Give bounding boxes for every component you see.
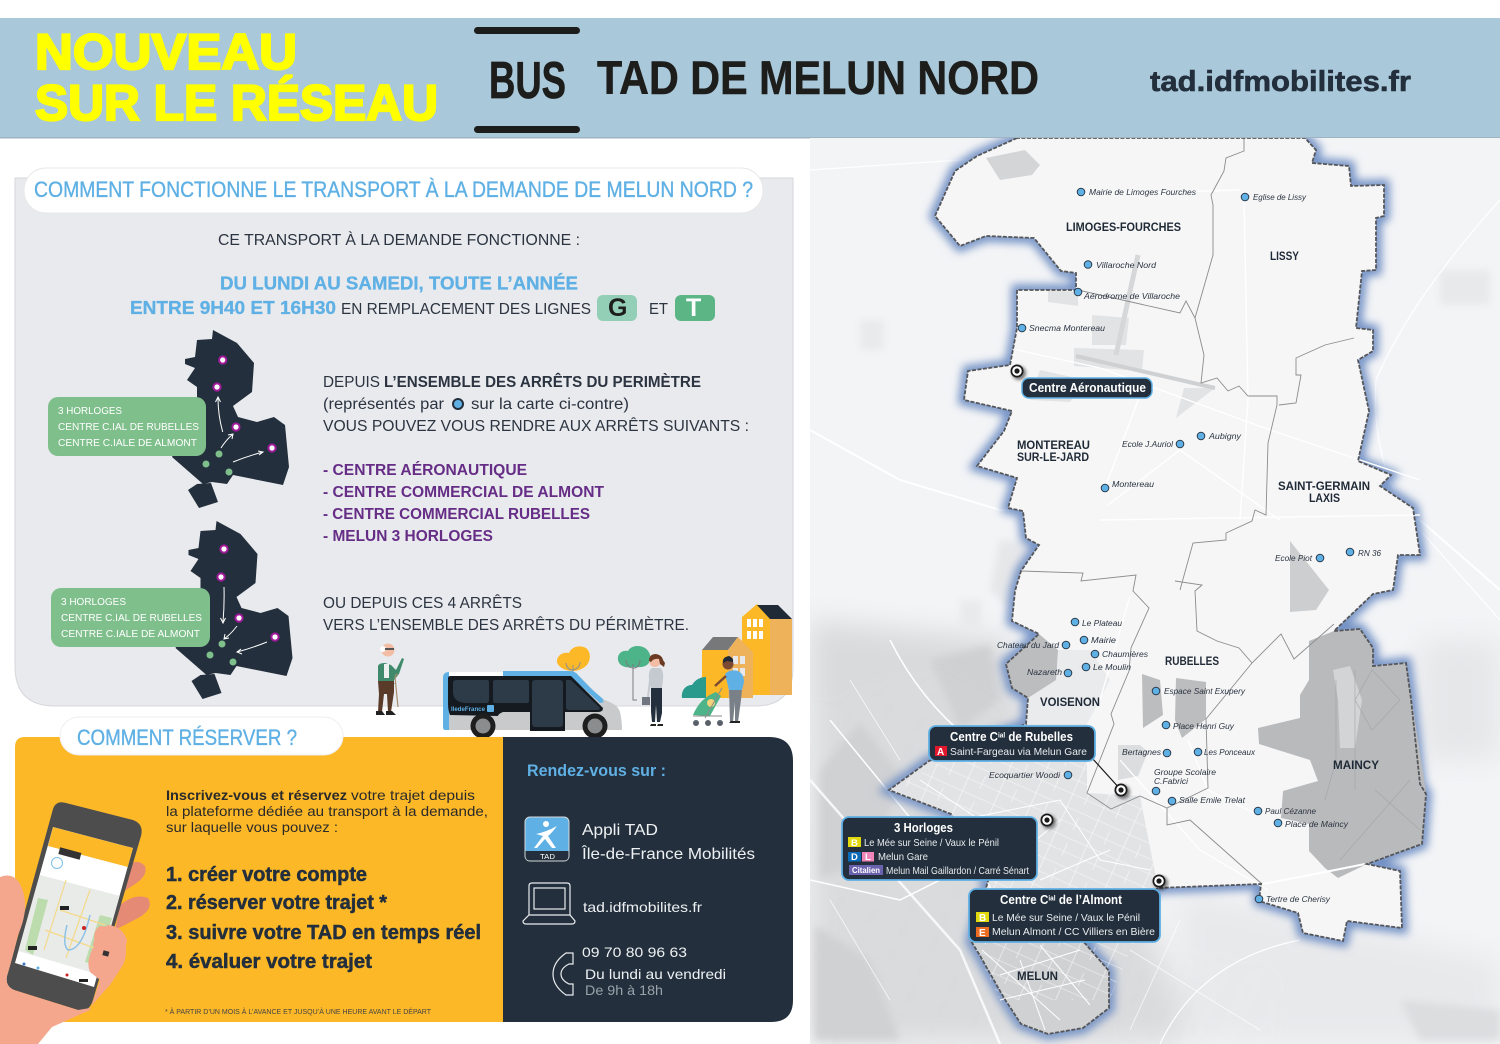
map diagram 2: from hubs to all stops: CENTRE C.IALE DE ALMONT	[61, 628, 201, 640]
icon: TAD app: TAD	[540, 852, 556, 861]
return trip text	[323, 595, 689, 634]
callout: 3 Horloges: Melun Mail Gaillardon / Carré Sénart	[886, 865, 1029, 877]
phone number and hours: De 9h à 18h	[585, 982, 663, 998]
commune labels: MAINCY	[1333, 758, 1379, 772]
map diagram 1: from all stops to hubs: CENTRE C.IAL DE RUBELLES	[58, 421, 199, 433]
schedule text: CE TRANSPORT À LA DEMANDE FONCTIONNE :	[218, 232, 580, 249]
stop labels: Eglise de Lissy	[1253, 192, 1307, 202]
illustration: hand holding phone	[0, 802, 150, 1044]
illustration: yellow tree	[557, 646, 590, 675]
stop labels	[989, 187, 1381, 904]
callout: Centre Commercial de Rubelles: A	[937, 747, 944, 758]
callout: Centre Commercial de l'Almont: B	[979, 913, 986, 924]
callout: 3 Horloges	[842, 817, 1037, 880]
footnote: * À PARTIR D’UN MOIS À L’AVANCE ET JUSQU’À UNE HEURE AVANT LE DÉPART	[165, 1007, 432, 1016]
line badge T: T	[686, 294, 701, 322]
stop labels: Tertre de Cherisy	[1266, 894, 1331, 904]
return trip text: OU DEPUIS CES 4 ARRÊTS	[323, 595, 522, 612]
booking intro: votre trajet depuis	[351, 787, 475, 803]
section title pill	[60, 717, 343, 755]
header band	[0, 18, 1500, 138]
service-area dashed outline	[889, 138, 1426, 1034]
commune labels: LAXIS	[1309, 491, 1340, 505]
callout: Centre Commercial de l'Almont: Melun Almont / CC Villiers en Bière	[992, 926, 1155, 938]
icon: phone handset	[553, 953, 573, 995]
destination list: - CENTRE COMMERCIAL DE ALMONT	[323, 484, 605, 501]
web address: tad.idfmobilites.fr	[583, 899, 702, 915]
commune labels: RUBELLES	[1165, 654, 1219, 668]
stop labels: Le Plateau	[1082, 618, 1122, 628]
destination list: - MELUN 3 HORLOGES	[323, 528, 493, 545]
stop labels: Chateau du Jard	[997, 640, 1060, 650]
callout: 3 Horloges: B	[851, 838, 858, 849]
map background	[790, 138, 1500, 1044]
commune labels: SAINT-GERMAIN	[1278, 479, 1370, 493]
commune labels: LISSY	[1270, 249, 1299, 263]
service-area fill	[889, 138, 1426, 1034]
icon: laptop	[523, 883, 575, 924]
booking intro: sur laquelle vous pouvez :	[166, 819, 338, 835]
stop labels: Villaroche Nord	[1096, 260, 1157, 270]
illustration: woman with bag	[642, 654, 665, 726]
destination list: - CENTRE AÉRONAUTIQUE	[323, 462, 527, 479]
panel: how it works	[15, 168, 793, 706]
schedule text: ENTRE 9H40 ET 16H30	[130, 298, 336, 318]
callout: 3 Horloges: Citalien	[852, 866, 880, 875]
schedule text: ET	[649, 301, 669, 318]
callout: 3 Horloges: D	[851, 852, 858, 863]
destination list: - CENTRE COMMERCIAL RUBELLES	[323, 506, 590, 523]
stop labels: Ecoquartier Woodi	[989, 770, 1061, 780]
stop labels: Bertagnes	[1122, 747, 1162, 757]
stop labels: C.Fabrici	[1154, 776, 1189, 786]
map diagram 2: from hubs to all stops	[51, 521, 292, 699]
stop labels: RN 36	[1358, 548, 1381, 558]
commune labels: SUR-LE-JARD	[1017, 450, 1089, 464]
section title pill: COMMENT FONCTIONNE LE TRANSPORT À LA DEMANDE DE MELUN NORD ?	[34, 177, 753, 202]
bus logo	[474, 27, 580, 133]
bus logo: BUS	[489, 52, 566, 110]
callout: 3 Horloges: L	[865, 852, 871, 863]
map diagram 1: from all stops to hubs	[48, 330, 289, 508]
stop labels: Aérodrome de Villaroche	[1083, 291, 1180, 301]
illustration: green tree	[618, 646, 650, 700]
land use patches	[889, 150, 1426, 1034]
section title pill: COMMENT RÉSERVER ?	[77, 725, 297, 750]
line title: TAD DE MELUN NORD	[597, 51, 1039, 104]
callout: 3 Horloges: Melun Gare	[878, 851, 928, 863]
map diagram 1: from all stops to hubs: CENTRE C.IALE DE ALMONT	[58, 437, 198, 449]
callout: Centre Commercial de l'Almont	[969, 889, 1160, 942]
destination text	[323, 373, 749, 435]
callout: Centre Commercial de Rubelles: ial	[998, 732, 1005, 740]
icon: TAD app	[525, 817, 569, 861]
stop labels: Nazareth	[1027, 667, 1062, 677]
phone number and hours: 09 70 80 96 63	[582, 944, 687, 960]
app label: Île-de-France Mobilités	[581, 844, 755, 863]
callout: Centre Commercial de l'Almont: ial	[1048, 896, 1056, 902]
commune labels: MELUN	[1017, 969, 1058, 983]
callout: Centre Commercial de l'Almont: Centre C	[1000, 893, 1052, 907]
commune labels: MONTEREAU	[1017, 438, 1090, 452]
stop labels: Les Ponceaux	[1204, 747, 1256, 757]
stop labels: Mairie	[1091, 635, 1116, 645]
schedule text	[130, 232, 669, 318]
stop labels: Chaumières	[1102, 649, 1149, 659]
headline: nouveau sur le réseau: SUR LE RÉSEAU	[35, 75, 438, 131]
callout: Centre Commercial de l'Almont: E	[979, 928, 986, 939]
stop labels: Groupe Scolaire	[1154, 767, 1216, 777]
map of the service area	[790, 138, 1500, 1044]
panel: contact options (dark)	[503, 737, 793, 1022]
phone number and hours: Du lundi au vendredi	[585, 966, 726, 982]
booking steps: 3. suivre votre TAD en temps réel	[166, 922, 481, 944]
destination text: L’ENSEMBLE DES ARRÊTS DU PERIMÈTRE	[384, 373, 701, 391]
line badge T	[675, 294, 715, 322]
callout: Centre Commercial de Rubelles: de Rubelles	[1005, 730, 1073, 744]
line badge G: G	[608, 294, 627, 322]
callout: Centre Commercial de l'Almont: Le Mée sur Seine / Vaux le Pénil	[992, 912, 1140, 924]
map diagram 1: from all stops to hubs: 3 HORLOGES	[58, 405, 122, 417]
app label	[581, 822, 755, 863]
contact heading: Rendez-vous sur :	[527, 761, 666, 780]
stop labels: Le Moulin	[1093, 662, 1131, 672]
schedule text: DU LUNDI AU SAMEDI, TOUTE L’ANNÉE	[220, 272, 578, 294]
callout: 3 Horloges: Le Mée sur Seine / Vaux le Pénil	[864, 837, 999, 849]
line badge G	[597, 294, 637, 322]
booking intro	[166, 787, 488, 835]
hub pin: Centre Almont	[1152, 874, 1168, 890]
commune labels: VOISENON	[1040, 695, 1100, 709]
callout: Centre Commercial de Rubelles	[929, 726, 1095, 761]
stop labels: Montereau	[1112, 479, 1154, 489]
stop labels: Place de Maincy	[1285, 819, 1349, 829]
illustration: man with stroller	[693, 656, 744, 726]
callout: Centre Aéronautique: Centre Aéronautique	[1029, 381, 1146, 395]
booking steps: 4. évaluer votre trajet	[166, 951, 372, 973]
panel: booking (yellow)	[15, 717, 503, 1022]
stop labels: Espace Saint Exupery	[1164, 686, 1246, 696]
callout: Centre Commercial de Rubelles: Saint-Fargeau via Melun Gare	[950, 746, 1087, 758]
commune labels	[1017, 220, 1379, 983]
illustration: bus	[443, 671, 622, 738]
map diagram 2: from hubs to all stops: 3 HORLOGES	[61, 596, 126, 608]
stop labels: Salle Emile Trelat	[1179, 795, 1246, 805]
booking intro: Inscrivez-vous et réservez	[166, 787, 347, 803]
callout: Centre Aéronautique	[1022, 378, 1152, 398]
hub pin: 3 Horloges	[1040, 814, 1056, 829]
booking intro: la plateforme dédiée au transport à la demande,	[166, 803, 488, 819]
website url: tad.idfmobilites.fr	[1150, 66, 1411, 98]
destination text: sur la carte ci-contre)	[471, 396, 629, 413]
illustration: bus: IledeFrance	[451, 706, 485, 713]
destination list	[323, 462, 605, 545]
callout: Centre Commercial de l'Almont: de l’Almont	[1056, 893, 1123, 907]
destination text: (représentés par	[323, 396, 444, 413]
stop labels: Ecole Piot	[1275, 553, 1313, 563]
destination text: DEPUIS	[323, 374, 380, 391]
return trip text: VERS L’ENSEMBLE DES ARRÊTS DU PÉRIMÈTRE.	[323, 617, 689, 634]
destination text: VOUS POUVEZ VOUS RENDRE AUX ARRÊTS SUIVANTS :	[323, 418, 749, 435]
callout: 3 Horloges: 3 Horloges	[894, 821, 953, 835]
stop labels: Ecole J.Auriol	[1122, 439, 1174, 449]
stop labels: Snecma Montereau	[1029, 323, 1105, 333]
stop labels: Mairie de Limoges Fourches	[1089, 187, 1197, 197]
hub pin: Centre Rubelles with leader	[1092, 758, 1130, 799]
booking steps: 1. créer votre compte	[166, 864, 367, 886]
hub pin: Centre Aéronautique	[1010, 364, 1026, 380]
callout: Centre Commercial de Rubelles: Centre C	[950, 730, 1002, 744]
booking steps: 2. réserver votre trajet *	[166, 892, 387, 914]
stop labels: Place Henri Guy	[1173, 721, 1235, 731]
phone number and hours	[582, 944, 726, 998]
service-area boundary glow	[889, 138, 1426, 1034]
commune borders	[1021, 138, 1354, 884]
section title pill	[24, 168, 763, 213]
stop labels: Aubigny	[1208, 431, 1242, 441]
stop labels: Paul Cézanne	[1265, 806, 1316, 816]
map diagram 2: from hubs to all stops: CENTRE C.IAL DE RUBELLES	[61, 612, 202, 624]
schedule text: EN REMPLACEMENT DES LIGNES	[341, 301, 591, 318]
stop markers	[1018, 188, 1354, 903]
illustration: buildings	[682, 604, 792, 698]
commune labels: LIMOGES-FOURCHES	[1066, 220, 1181, 234]
booking steps	[166, 864, 481, 973]
app label: Appli TAD	[582, 822, 658, 839]
headline: nouveau sur le réseau: NOUVEAU	[35, 24, 297, 80]
headline: nouveau sur le réseau	[35, 24, 438, 131]
illustration: elderly man	[376, 644, 404, 715]
